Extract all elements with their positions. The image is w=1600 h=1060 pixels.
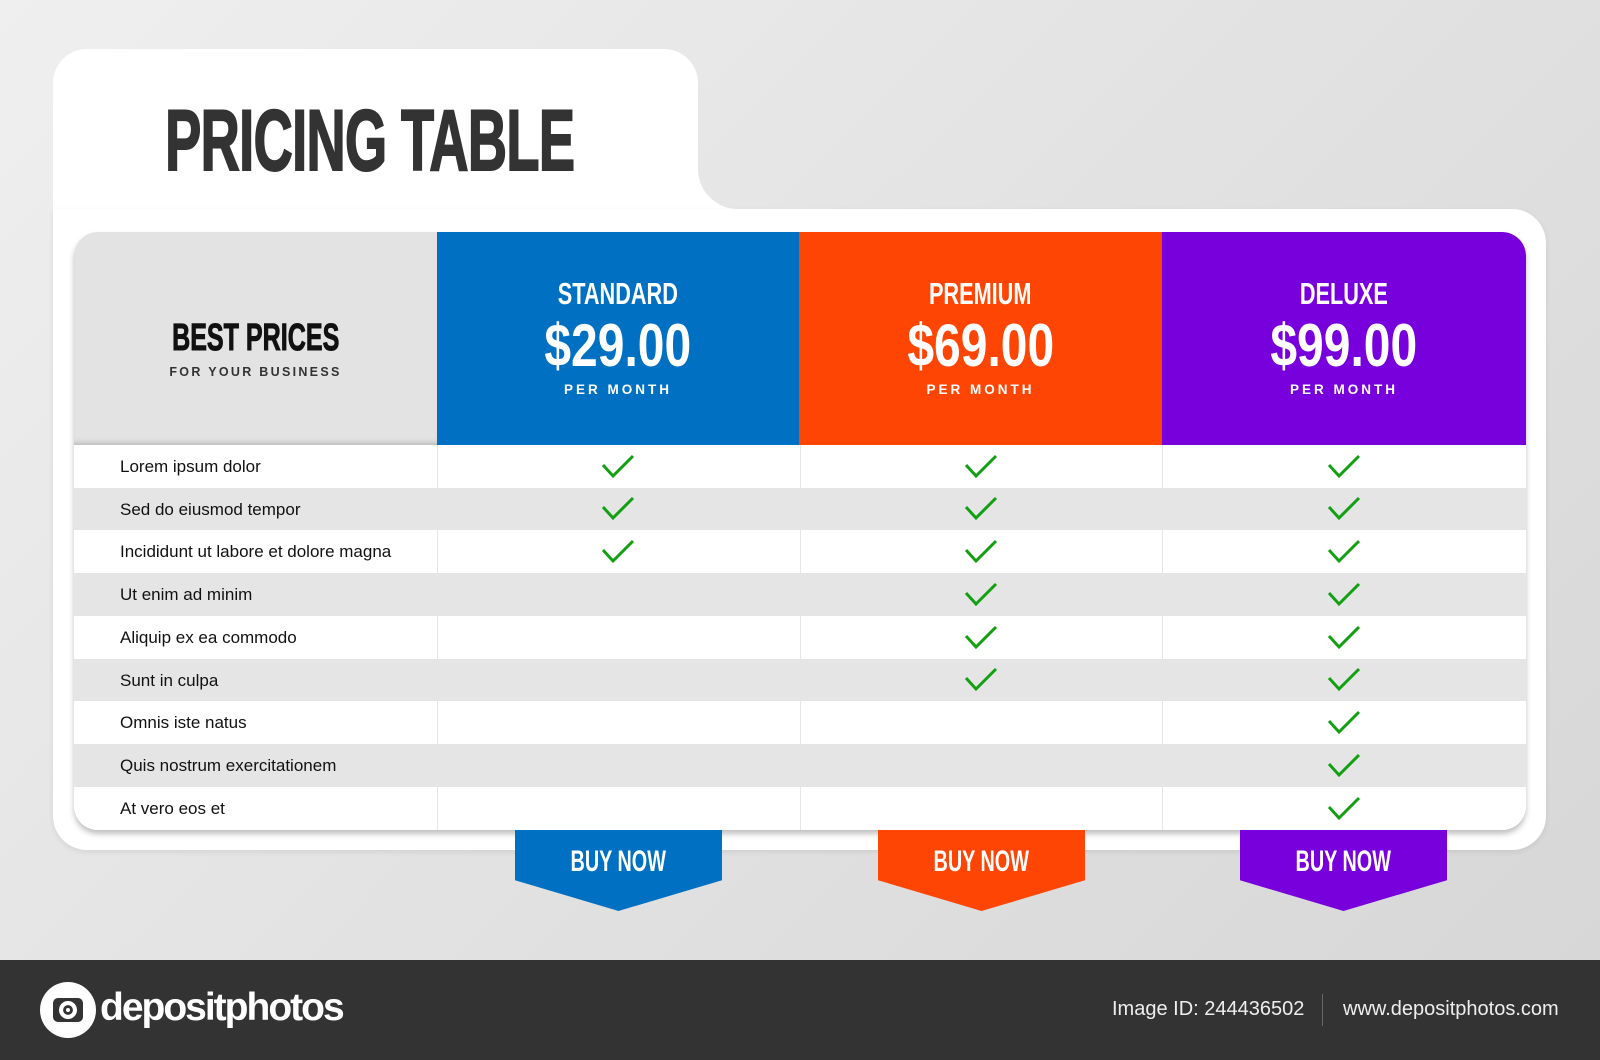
header: best prices: BEST PRICES xyxy=(172,317,339,359)
header: deluxe: DELUXE xyxy=(1300,276,1388,311)
footer bar xyxy=(0,960,1600,1060)
title: PRICING TABLE xyxy=(165,93,574,189)
header: standard: $29.00 xyxy=(545,312,691,379)
header: premium xyxy=(799,232,1162,445)
header: deluxe xyxy=(1162,232,1526,445)
buy now: premium: BUY NOW xyxy=(934,845,1029,878)
header: premium: PER MONTH xyxy=(926,382,1034,397)
header: standard xyxy=(437,232,799,445)
feature rows xyxy=(74,457,1526,830)
feature rows: Quis nostrum exercitationem xyxy=(120,756,336,775)
image id: Image ID: 244436502 xyxy=(1112,998,1304,1020)
header: deluxe: PER MONTH xyxy=(1290,382,1398,397)
buy now: standard xyxy=(515,830,722,911)
logo icon xyxy=(40,982,96,1038)
table xyxy=(74,232,1526,830)
buy now: standard: BUY NOW xyxy=(571,845,666,878)
feature rows: At vero eos et xyxy=(120,799,225,818)
feature rows: Sunt in culpa xyxy=(120,671,218,690)
feature rows: Omnis iste natus xyxy=(120,713,247,732)
white card xyxy=(52,49,1546,852)
tab xyxy=(53,49,698,249)
header: premium: $69.00 xyxy=(907,312,1054,379)
logo text: depositphotos xyxy=(100,986,343,1029)
feature rows: Aliquip ex ea commodo xyxy=(120,628,297,647)
header: best prices xyxy=(74,232,437,445)
header: best prices: FOR YOUR BUSINESS xyxy=(169,365,342,379)
url: www.depositphotos.com xyxy=(1343,998,1559,1020)
header: standard: PER MONTH xyxy=(564,382,672,397)
feature rows: Incididunt ut labore et dolore magna xyxy=(120,542,391,561)
buy now: premium xyxy=(878,830,1085,911)
header: standard: STANDARD xyxy=(558,276,678,311)
feature rows: Lorem ipsum dolor xyxy=(120,457,261,476)
feature rows: Sed do eiusmod tempor xyxy=(120,500,300,519)
buy now: deluxe: BUY NOW xyxy=(1296,845,1391,878)
buy now: deluxe xyxy=(1240,830,1447,911)
header: premium: PREMIUM xyxy=(929,276,1032,311)
header: deluxe: $99.00 xyxy=(1271,312,1417,379)
feature rows: Ut enim ad minim xyxy=(120,585,252,604)
